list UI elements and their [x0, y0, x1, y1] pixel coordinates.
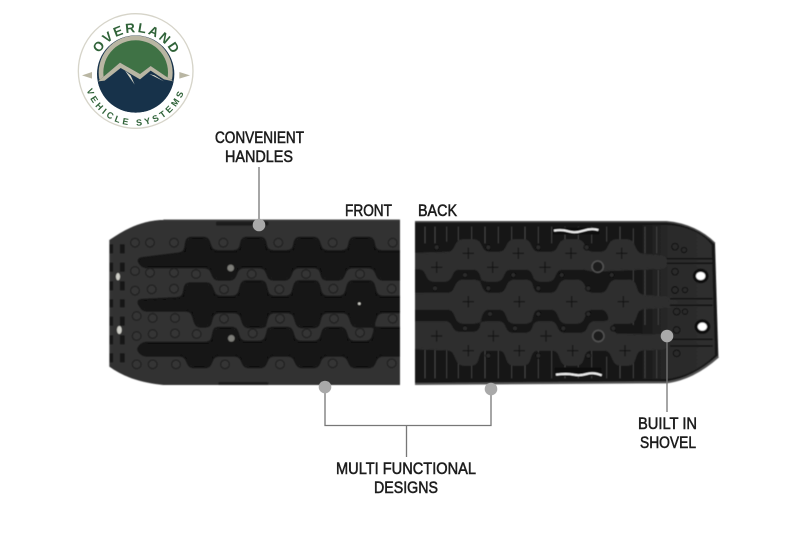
callout: built in shovel [638, 330, 697, 452]
grip studs: front [131, 238, 397, 369]
ring studs: back [592, 261, 604, 342]
callout: built in shovel: SHOVEL [640, 434, 696, 452]
moulded ribs [425, 227, 658, 378]
shovel grooves [667, 259, 713, 346]
callout: convenient handles: HANDLES [225, 148, 293, 166]
callout: convenient handles [215, 129, 304, 231]
callout: multi functional designs: DESIGNS [374, 479, 438, 497]
handle slots: back [553, 227, 602, 376]
label: back: BACK [418, 202, 457, 220]
recovery board: back view [403, 222, 718, 384]
callout: convenient handles: CONVENIENT [215, 129, 304, 147]
mounting holes: front [116, 273, 361, 334]
callout: multi functional designs [319, 381, 497, 497]
logo: Overland Vehicle Systems badge [78, 13, 194, 129]
small studs: back [432, 243, 688, 358]
callout: built in shovel: BUILT IN [638, 415, 697, 433]
logo: Overland Vehicle Systems badge: OVERLAND [94, 23, 178, 52]
mounting holes: back [693, 269, 710, 334]
label: front: FRONT [345, 202, 392, 220]
tread lugs: back [403, 242, 675, 363]
cross marks on lugs [431, 248, 631, 356]
small marker dots: front [227, 265, 235, 342]
callout: multi functional designs: MULTI FUNCTIONAL [336, 460, 476, 478]
recovery board: front view [109, 220, 410, 385]
shovel blade [637, 225, 715, 379]
logo: Overland Vehicle Systems badge: VEHICLE SYSTEMS [87, 88, 183, 126]
handle slots: front [216, 222, 268, 385]
tread channels: front [137, 238, 410, 367]
perforations: front left edge [110, 244, 125, 362]
